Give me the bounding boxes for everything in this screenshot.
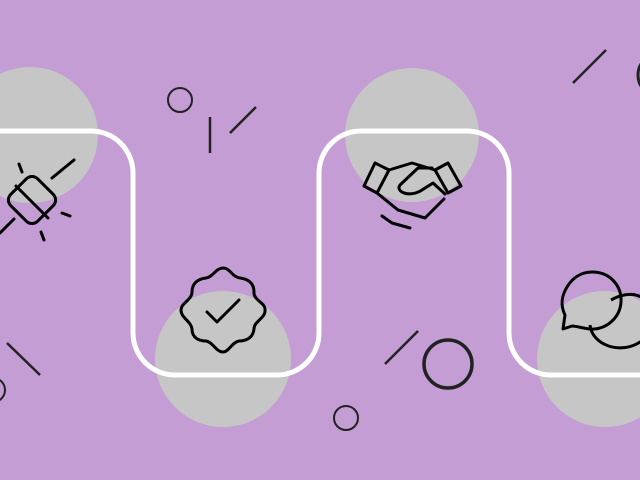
gray circle 3 [345,68,479,202]
gray circle 1 [0,67,98,203]
icon: chat bubbles [562,272,640,348]
gray circle 4 [537,291,640,427]
white winding path [0,131,640,375]
icon: handshake [364,163,461,228]
decorations [0,50,640,430]
icon: plug connector [0,160,74,240]
gray circle 2 [155,291,291,427]
icon: badge check [181,268,265,352]
